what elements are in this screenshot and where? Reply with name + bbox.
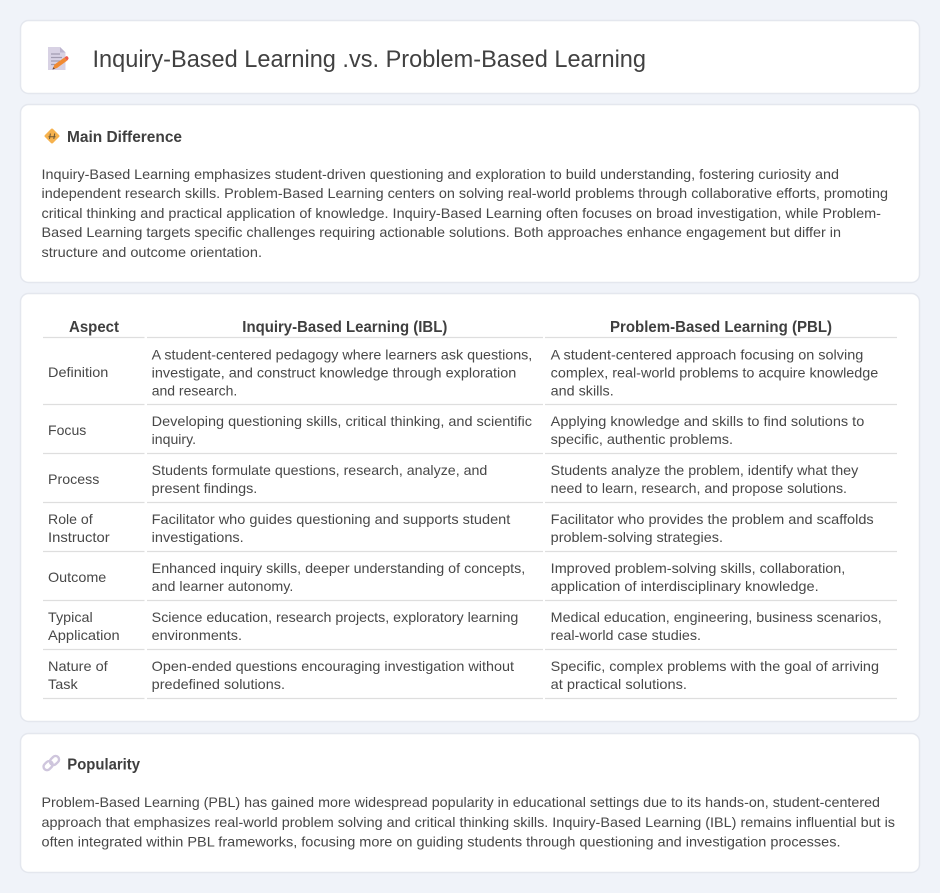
- row: focus: inquiry.: [152, 431, 196, 447]
- table header: Inquiry-Based Learning (IBL): [242, 319, 447, 336]
- row: process: Students analyze the problem, identify what they: [551, 462, 858, 478]
- panel: title card: [20, 20, 920, 94]
- row: typical application: Science education, research projects, exploratory learning: [152, 609, 518, 625]
- row: focus: Applying knowledge and skills to find solutions to: [551, 413, 865, 429]
- text block: popularity paragraph: often integrated within PBL frameworks, focusing more on guiding students through questioning and investigation processes.: [42, 834, 841, 850]
- text block: main difference paragraph: [42, 166, 888, 260]
- row: nature of task: [43, 658, 897, 698]
- row: role of instructor: problem-solving strategies.: [551, 529, 723, 545]
- row: definition: complex, real-world problems to acquire knowledge: [551, 364, 879, 380]
- row: outcome: [43, 560, 897, 600]
- row: typical application: Medical education, engineering, business scenarios,: [551, 609, 882, 625]
- row: focus: Developing questioning skills, critical thinking, and scientific: [152, 413, 532, 429]
- row: role of instructor: Facilitator who provides the problem and scaffolds: [551, 511, 874, 527]
- table header: Aspect: [69, 319, 120, 336]
- row: typical application: real-world case studies.: [551, 627, 701, 643]
- row: focus: Focus: [48, 422, 86, 438]
- text block: main difference paragraph: Based Learning targets specific challenges requiring actionable solutions. Both approaches enhance engagement but differ in: [42, 224, 841, 240]
- row: role of instructor: investigations.: [152, 529, 244, 545]
- icon: orange diamond sign: [44, 128, 60, 144]
- heading: main difference: Main Difference: [67, 129, 182, 146]
- icon: chain link: [42, 754, 61, 772]
- title: Inquiry-Based Learning .vs. Problem-Based Learning: [92, 46, 646, 73]
- row: outcome: and learner autonomy.: [152, 578, 293, 594]
- panel: main difference: [20, 104, 920, 282]
- text block: main difference paragraph: critical thinking and practical application of knowledge. Inquiry-Based Learning often focuses on broad investigation, while Problem-: [42, 205, 881, 221]
- row: role of instructor: [43, 511, 897, 552]
- row: definition: A student-centered pedagogy where learners ask questions,: [152, 346, 532, 362]
- row: typical application: environments.: [152, 627, 242, 643]
- panel: popularity: [20, 734, 920, 872]
- row: process: Process: [48, 471, 99, 487]
- text block: main difference paragraph: Inquiry-Based Learning emphasizes student-driven questioning and exploration to build understanding, fostering curiosity and: [42, 166, 839, 182]
- row: outcome: Outcome: [48, 569, 107, 585]
- row: outcome: application of interdisciplinary knowledge.: [551, 578, 819, 594]
- text block: main difference paragraph: structure and outcome orientation.: [42, 244, 262, 260]
- text block: popularity paragraph: approach that emphasizes real-world problem solving and critical thinking skills. Inquiry-Based Learning (IBL) remains influential but is: [42, 814, 895, 830]
- heading: popularity: Popularity: [67, 756, 140, 774]
- row: focus: specific, authentic problems.: [551, 431, 733, 447]
- table header: Problem-Based Learning (PBL): [610, 319, 832, 336]
- row: process: Students formulate questions, research, analyze, and: [152, 462, 487, 478]
- row: nature of task: Nature of: [48, 658, 108, 674]
- text block: main difference paragraph: independent research skills. Problem-Based Learning centers on solving real-world problems through collaborative efforts, promoting: [42, 185, 888, 201]
- row: nature of task: predefined solutions.: [152, 676, 285, 692]
- row: focus: [43, 413, 897, 454]
- row: role of instructor: Role of: [48, 511, 93, 527]
- panel: comparison table: [20, 294, 920, 722]
- row: nature of task: at practical solutions.: [551, 676, 687, 692]
- text block: popularity paragraph: Problem-Based Learning (PBL) has gained more widespread popularity in educational settings due to its hands-on, student-centered: [42, 794, 880, 810]
- row: role of instructor: Facilitator who guides questioning and supports student: [152, 511, 510, 527]
- row: definition: and skills.: [551, 382, 614, 398]
- row: definition: [43, 346, 897, 404]
- text block: popularity paragraph: [42, 794, 895, 850]
- row: definition: A student-centered approach focusing on solving: [551, 346, 863, 362]
- row: definition: Definition: [48, 364, 108, 380]
- row: typical application: Application: [48, 627, 120, 643]
- row: nature of task: Task: [48, 676, 79, 692]
- row: typical application: Typical: [48, 609, 93, 625]
- row: outcome: Improved problem-solving skills, collaboration,: [551, 560, 845, 576]
- row: role of instructor: Instructor: [48, 529, 110, 545]
- row: definition: and research.: [152, 382, 237, 398]
- row: outcome: Enhanced inquiry skills, deeper understanding of concepts,: [152, 560, 525, 576]
- row: typical application: [43, 609, 897, 650]
- row: process: present findings.: [152, 480, 257, 496]
- row: nature of task: Open-ended questions encouraging investigation without: [152, 658, 514, 674]
- row: definition: investigate, and construct knowledge through exploration: [152, 364, 516, 380]
- table header: [43, 319, 897, 338]
- row: nature of task: Specific, complex problems with the goal of arriving: [551, 658, 879, 674]
- row: process: need to learn, research, and propose solutions.: [551, 480, 847, 496]
- row: process: [43, 462, 897, 502]
- icon: document with pencil: [48, 47, 69, 70]
